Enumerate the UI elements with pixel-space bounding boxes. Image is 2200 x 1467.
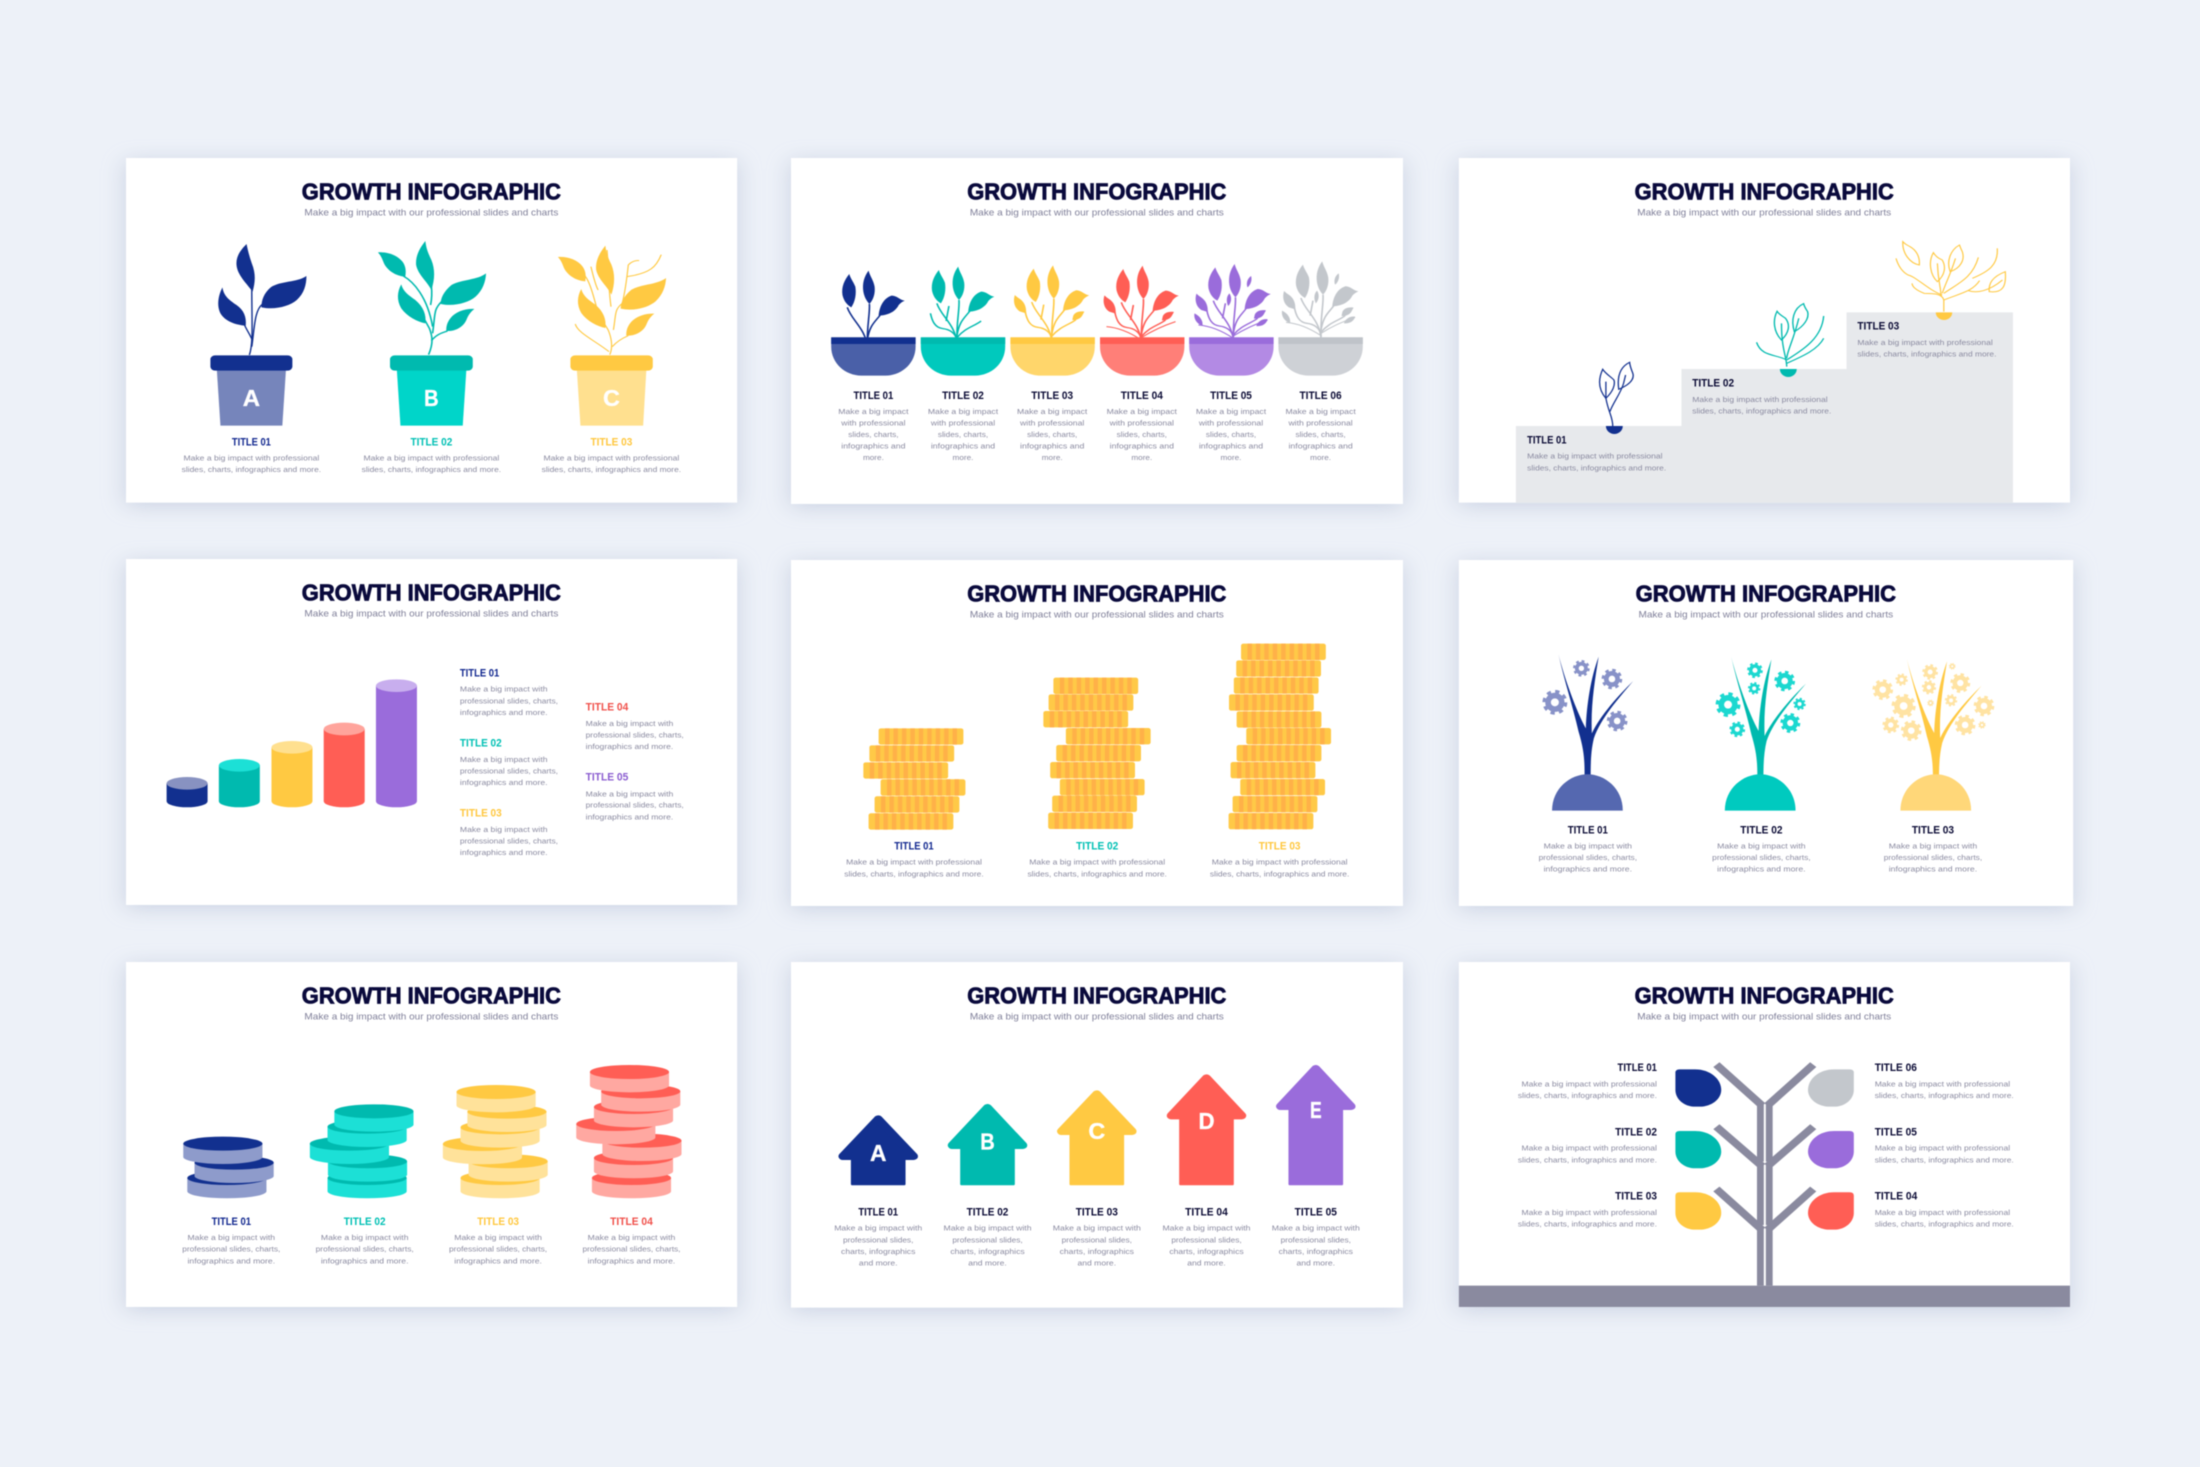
text: title 04: Make a big impact with professional <box>1875 1208 2010 1217</box>
icon: red bowl plant <box>1100 266 1184 376</box>
heading <box>1635 179 1894 218</box>
text: title 01: Make a big impact with professional <box>846 857 982 866</box>
icon: coin stack 3 <box>1229 644 1331 829</box>
text: title 03: Make a big impact with professional <box>1522 1208 1657 1217</box>
text: title 04: and more. <box>1187 1258 1226 1267</box>
icon: coin stack 1 <box>863 728 965 830</box>
text: title 05: more. <box>1221 453 1241 462</box>
text: title 04: Make a big impact with <box>1162 1223 1251 1232</box>
heading: GROWTH INFOGRAPHIC <box>967 581 1226 607</box>
icon: teal disc stack <box>310 1104 414 1198</box>
text: title 03: Make a big impact with <box>460 825 548 834</box>
text: title 06: infographics and <box>1288 441 1353 450</box>
text: title 04: slides, charts, infographics and more. <box>1875 1219 2014 1228</box>
text: title 03: slides, charts, infographics and more. <box>542 465 681 474</box>
text: title 02: infographics and more. <box>460 778 548 787</box>
text: title 04: Make a big impact with <box>588 1233 676 1242</box>
icon: blue sprout <box>1600 362 1633 434</box>
text: title 03: with professional <box>1019 418 1084 427</box>
text: title 06: slides, charts, <box>1295 430 1346 439</box>
text: title 04: professional slides, <box>1171 1235 1242 1244</box>
text: title 03: TITLE 03 <box>1259 839 1301 852</box>
text: title 05: professional slides, <box>1281 1235 1351 1244</box>
text: title 02 <box>316 1215 414 1265</box>
heading: GROWTH INFOGRAPHIC <box>302 580 561 606</box>
text: title 03 <box>1857 320 1996 358</box>
text: title 05: slides, charts, infographics and more. <box>1875 1155 2014 1164</box>
text: title 02: TITLE 02 <box>344 1215 386 1228</box>
text: title 02: slides, charts, infographics and more. <box>1518 1155 1657 1164</box>
heading: GROWTH INFOGRAPHIC <box>1636 581 1896 607</box>
text: title 04: TITLE 04 <box>1185 1205 1228 1218</box>
text: title 02: slides, charts, <box>938 430 988 439</box>
text: title 02 <box>944 1205 1032 1267</box>
text: title 01: slides, charts, infographics and more. <box>844 869 984 878</box>
text: title 02 <box>1027 839 1167 878</box>
text: title 02: with professional <box>930 418 995 427</box>
text: title 04: infographics and more. <box>586 742 673 751</box>
text: title 02: slides, charts, infographics and more. <box>1692 406 1831 415</box>
text: title 06: slides, charts, infographics and more. <box>1875 1091 2014 1100</box>
text: title 01: more. <box>863 453 884 462</box>
icon: blue disc stack <box>183 1137 274 1198</box>
text: title 01: TITLE 01 <box>854 389 894 402</box>
text: title 04 <box>1875 1190 2014 1228</box>
text: title 02: and more. <box>968 1258 1007 1267</box>
text: title 03: Make a big impact with <box>454 1233 542 1242</box>
text: title 03: Make a big impact with professional <box>543 453 679 462</box>
panel: cylinder bar chart <box>126 559 737 905</box>
text: title 02: Make a big impact with <box>321 1233 409 1242</box>
panel: six bowls <box>791 158 1403 504</box>
text: title 01: TITLE 01 <box>1527 434 1567 446</box>
panel: potted plants <box>126 158 737 503</box>
text: title 01 <box>1539 823 1637 873</box>
arrow E <box>1280 1069 1351 1185</box>
text: title 05: slides, charts, <box>1206 430 1256 439</box>
text: title 01: infographics and more. <box>188 1256 275 1265</box>
text: title 04: professional slides, charts, <box>586 730 684 739</box>
text: title 01: Make a big impact <box>838 407 909 416</box>
icon: yellow sprout <box>1896 242 2005 320</box>
text: title 03: Make a big impact with professional <box>1212 857 1348 866</box>
text: title 06 <box>1875 1061 2014 1100</box>
arrow D: D <box>1198 1109 1215 1134</box>
text: title 01: slides, charts, infographics and more. <box>182 465 321 474</box>
text: title 05: infographics and more. <box>586 812 673 821</box>
text: title 03: TITLE 03 <box>591 435 633 448</box>
text: title 02: more. <box>953 453 973 462</box>
heading: Make a big impact with our professional slides and charts <box>970 610 1224 620</box>
icon: coin stack 2 <box>1043 678 1151 829</box>
text: title 02: charts, infographics <box>950 1247 1025 1256</box>
text: title 03: TITLE 03 <box>1615 1190 1657 1202</box>
text: title 01 <box>182 1215 280 1265</box>
panel: disc stacks <box>126 962 737 1307</box>
text: title 01: infographics and more. <box>460 708 548 717</box>
text: title 03: TITLE 03 <box>1912 823 1954 836</box>
heading: Make a big impact with our professional slides and charts <box>304 208 558 218</box>
icon: teal sprout <box>1757 304 1824 377</box>
text: title 04: Make a big impact with <box>586 719 674 728</box>
text: title 01: charts, infographics <box>841 1247 915 1256</box>
text: title 01: TITLE 01 <box>894 839 934 852</box>
text: title 03: TITLE 03 <box>1857 320 1900 332</box>
heading: GROWTH INFOGRAPHIC <box>967 984 1226 1009</box>
heading <box>302 179 561 218</box>
text: title 01 <box>1527 434 1666 472</box>
text: title 03: TITLE 03 <box>1076 1205 1118 1218</box>
icon: red disc stack <box>576 1065 682 1198</box>
text: title 06: with professional <box>1287 418 1353 427</box>
panel: gear plants <box>1459 560 2073 906</box>
text: title 01: professional slides, charts, <box>1539 853 1637 862</box>
text: title 04 <box>582 1215 681 1265</box>
text: title 02: slides, charts, infographics and more. <box>362 465 501 474</box>
text: title 02: Make a big impact with <box>460 755 548 764</box>
text: title 02: Make a big impact with professional <box>363 453 499 462</box>
text: title 05: Make a big impact with professional <box>1875 1143 2010 1152</box>
text: title 03: TITLE 03 <box>1031 389 1073 402</box>
text: title 01 <box>1518 1061 1657 1100</box>
text: title 06: TITLE 06 <box>1875 1061 1917 1074</box>
text: title 06: TITLE 06 <box>1300 389 1342 402</box>
text: title 03: professional slides, charts, <box>449 1244 547 1253</box>
leaf: gray <box>1808 1069 1854 1107</box>
text: title 03: professional slides, charts, <box>460 836 558 845</box>
text: title 05: and more. <box>1296 1258 1335 1267</box>
heading: Make a big impact with our professional slides and charts <box>970 208 1224 218</box>
arrow C <box>1061 1094 1132 1185</box>
heading <box>302 580 561 619</box>
text: title 04: with professional <box>1109 418 1174 427</box>
text: title 05: infographics and <box>1199 441 1263 450</box>
text: title 01: Make a big impact with professional <box>183 453 319 462</box>
text: title 05 <box>1875 1125 2014 1164</box>
heading <box>1636 581 1896 620</box>
heading <box>967 179 1226 218</box>
text: title 02: TITLE 02 <box>460 737 502 749</box>
text: title 03: Make a big impact with <box>1889 841 1977 850</box>
text: title 02 <box>460 737 558 787</box>
text: title 01: Make a big impact with <box>1544 841 1632 850</box>
heading: Make a big impact with our professional slides and charts <box>970 1012 1224 1022</box>
heading: GROWTH INFOGRAPHIC <box>1635 983 1894 1009</box>
text: title 03 <box>1518 1190 1657 1228</box>
icon: blue bowl plant <box>831 271 916 376</box>
text: title 04: charts, infographics <box>1169 1247 1244 1256</box>
text: title 03: infographics and more. <box>460 848 548 857</box>
icon: yellow disc stack <box>443 1085 548 1198</box>
text: title 01: infographics and <box>841 441 906 450</box>
text: title 01: Make a big impact with <box>460 684 548 693</box>
heading: GROWTH INFOGRAPHIC <box>967 179 1226 205</box>
text: title 03: infographics and <box>1020 441 1085 450</box>
text: title 01: TITLE 01 <box>460 666 500 679</box>
text: title 03: Make a big impact <box>1017 407 1088 416</box>
arrow E: E <box>1310 1098 1322 1123</box>
heading: GROWTH INFOGRAPHIC <box>302 983 561 1009</box>
text: title 03 <box>460 807 558 857</box>
text: title 01: TITLE 01 <box>232 435 271 448</box>
text: title 05 <box>1272 1205 1360 1267</box>
icon: teal potted plant <box>378 241 486 426</box>
text: title 01: Make a big impact with <box>188 1233 275 1242</box>
text: title 02: professional slides, charts, <box>316 1244 414 1253</box>
text: title 06: Make a big impact <box>1285 407 1356 416</box>
icon: teal potted plant: B <box>424 386 439 411</box>
icon: blue potted plant <box>210 244 306 426</box>
heading <box>302 983 561 1022</box>
arrow D <box>1171 1078 1242 1185</box>
text: title 01: with professional <box>840 418 906 427</box>
text: title 03 <box>449 1215 547 1265</box>
text: title 02: TITLE 02 <box>967 1205 1009 1218</box>
text: title 02: slides, charts, infographics and more. <box>1027 869 1167 878</box>
text: title 02 <box>1518 1125 1657 1164</box>
text: title 03 <box>1210 839 1349 878</box>
text: title 02: TITLE 02 <box>942 389 984 402</box>
arrow A <box>843 1119 914 1185</box>
text: title 02: TITLE 02 <box>1076 839 1119 852</box>
icon: blue potted plant: A <box>243 386 260 411</box>
text: title 05: Make a big impact <box>1196 407 1267 416</box>
text: title 01: slides, charts, infographics and more. <box>1527 463 1666 472</box>
text: title 01 <box>182 435 321 474</box>
icon: yellow bowl plant <box>1010 265 1095 376</box>
text: title 03: infographics and more. <box>454 1256 542 1265</box>
text: title 02: Make a big impact with <box>1717 841 1806 850</box>
text: title 04: Make a big impact <box>1107 407 1178 416</box>
text: title 05: Make a big impact with <box>586 789 674 798</box>
stair steps <box>1516 312 2013 503</box>
text: title 03: more. <box>1042 453 1063 462</box>
text: title 02 <box>362 435 501 474</box>
text: title 01: Make a big impact with professional <box>1527 451 1663 460</box>
text: title 02: Make a big impact with professional <box>1692 395 1828 404</box>
text: title 03 <box>1017 389 1088 462</box>
text: title 04: infographics and more. <box>588 1256 675 1265</box>
text: title 02: professional slides, <box>952 1235 1023 1244</box>
text: title 05: TITLE 05 <box>1210 389 1252 402</box>
text: title 02: professional slides, charts, <box>460 766 558 775</box>
text: title 06 <box>1285 389 1356 462</box>
text: title 01: professional slides, charts, <box>460 696 558 705</box>
heading <box>967 984 1226 1022</box>
leaf: blue <box>1675 1069 1721 1107</box>
text: title 04: infographics and <box>1110 441 1174 450</box>
text: title 05: TITLE 05 <box>1875 1125 1917 1138</box>
text: title 06: Make a big impact with professional <box>1875 1079 2010 1088</box>
text: title 03: slides, charts, infographics and more. <box>1518 1219 1657 1228</box>
text: title 02: infographics and more. <box>321 1256 408 1265</box>
text: title 04: more. <box>1131 453 1152 462</box>
tree trunk and branches <box>1716 1065 1813 1286</box>
heading: Make a big impact with our professional slides and charts <box>1638 610 1893 620</box>
bar chart: cylinders <box>167 679 417 807</box>
panel: arrows <box>791 962 1403 1308</box>
icon: yellow gear plant <box>1874 659 1993 811</box>
icon: purple bowl plant <box>1189 264 1274 376</box>
text: title 01: professional slides, charts, <box>182 1244 280 1253</box>
text: title 05: Make a big impact with <box>1272 1223 1360 1232</box>
heading: GROWTH INFOGRAPHIC <box>1635 179 1894 205</box>
text: title 04: TITLE 04 <box>610 1215 653 1228</box>
text: title 02: Make a big impact with professional <box>1522 1143 1657 1152</box>
text: title 03: charts, infographics <box>1060 1247 1134 1256</box>
text: title 03: Make a big impact with professional <box>1857 338 1993 347</box>
ground <box>1459 1286 2070 1307</box>
text: title 02: Make a big impact with professional <box>1029 857 1165 866</box>
text: title 05: professional slides, charts, <box>586 800 684 809</box>
heading: Make a big impact with our professional slides and charts <box>1637 208 1891 218</box>
leaf: yellow <box>1675 1192 1721 1230</box>
text: title 01: infographics and more. <box>1544 864 1632 873</box>
text: title 06: more. <box>1310 453 1331 462</box>
icon: teal gear plant <box>1717 657 1806 811</box>
heading <box>1635 983 1894 1022</box>
text: title 01 <box>844 839 984 878</box>
text: title 03: professional slides, charts, <box>1884 853 1982 862</box>
text: title 01: and more. <box>859 1258 898 1267</box>
text: title 03: and more. <box>1078 1258 1116 1267</box>
text: title 04: TITLE 04 <box>586 701 629 713</box>
text: title 04 <box>586 701 684 751</box>
text: title 01 <box>834 1205 922 1267</box>
icon: blue gear plant <box>1544 654 1633 811</box>
text: title 05 <box>1196 389 1267 462</box>
icon: teal bowl plant <box>921 267 1005 376</box>
text: title 04 <box>1162 1205 1251 1267</box>
text: title 03 <box>1053 1205 1141 1267</box>
text: title 01 <box>460 666 558 717</box>
heading: Make a big impact with our professional slides and charts <box>1637 1012 1891 1022</box>
arrow A: A <box>870 1141 886 1166</box>
text: title 02: professional slides, charts, <box>1712 853 1811 862</box>
arrow B <box>952 1108 1023 1185</box>
text: title 02: infographics and more. <box>1717 864 1806 873</box>
text: title 01: TITLE 01 <box>858 1205 898 1218</box>
text: title 02: TITLE 02 <box>1692 376 1734 389</box>
text: title 01: professional slides, <box>843 1235 913 1244</box>
text: title 01: slides, charts, infographics and more. <box>1518 1091 1657 1100</box>
text: title 02: Make a big impact with <box>944 1223 1032 1232</box>
panel: stairs with sprouts <box>1459 158 2070 503</box>
icon: yellow potted plant: C <box>603 386 620 411</box>
text: title 05 <box>586 771 684 821</box>
panel: tree <box>1459 962 2070 1307</box>
text: title 05: TITLE 05 <box>586 771 629 783</box>
text: title 01: slides, charts, <box>848 430 899 439</box>
text: title 01 <box>838 389 909 462</box>
text: title 03: slides, charts, infographics and more. <box>1857 349 1996 358</box>
heading: GROWTH INFOGRAPHIC <box>302 179 561 205</box>
leaf: red <box>1808 1192 1854 1230</box>
text: title 01: TITLE 01 <box>1618 1061 1657 1074</box>
text: title 04 <box>1107 389 1178 462</box>
text: title 01: TITLE 01 <box>212 1215 251 1228</box>
text: title 02 <box>928 389 999 462</box>
text: title 04: professional slides, charts, <box>582 1244 681 1253</box>
icon: yellow potted plant <box>558 246 666 426</box>
text: title 03: infographics and more. <box>1889 864 1977 873</box>
text: title 01: TITLE 01 <box>1568 823 1608 836</box>
text: title 03: TITLE 03 <box>477 1215 519 1228</box>
text: title 05: TITLE 05 <box>1295 1205 1337 1218</box>
text: title 02 <box>1692 376 1831 415</box>
text: title 03 <box>1884 823 1982 873</box>
leaf: teal <box>1675 1131 1721 1168</box>
leaf: purple <box>1808 1131 1854 1168</box>
text: title 03: slides, charts, <box>1027 430 1077 439</box>
text: title 03: slides, charts, infographics and more. <box>1210 869 1349 878</box>
text: title 05: with professional <box>1198 418 1263 427</box>
text: title 01: Make a big impact with <box>834 1223 922 1232</box>
heading: Make a big impact with our professional slides and charts <box>304 1012 558 1022</box>
heading <box>967 581 1226 620</box>
arrow C: C <box>1088 1119 1105 1144</box>
panel: coin stacks <box>791 560 1403 906</box>
text: title 05: charts, infographics <box>1279 1247 1353 1256</box>
text: title 04: slides, charts, <box>1117 430 1167 439</box>
text: title 03: professional slides, <box>1062 1235 1132 1244</box>
text: title 04: TITLE 04 <box>1121 389 1163 402</box>
text: title 02: TITLE 02 <box>1740 823 1783 836</box>
text: title 02: Make a big impact <box>928 407 999 416</box>
text: title 01: Make a big impact with professional <box>1522 1079 1657 1088</box>
arrow B: B <box>980 1130 995 1155</box>
text: title 02 <box>1712 823 1811 873</box>
text: title 02: infographics and <box>931 441 995 450</box>
text: title 03: Make a big impact with <box>1053 1223 1141 1232</box>
text: title 03: TITLE 03 <box>460 807 502 819</box>
heading: Make a big impact with our professional slides and charts <box>304 609 558 619</box>
text: title 02: TITLE 02 <box>411 435 453 448</box>
text: title 04: TITLE 04 <box>1875 1190 1918 1202</box>
text: title 03 <box>542 435 681 474</box>
text: title 02: TITLE 02 <box>1615 1125 1657 1138</box>
icon: gray bowl plant <box>1278 261 1363 376</box>
